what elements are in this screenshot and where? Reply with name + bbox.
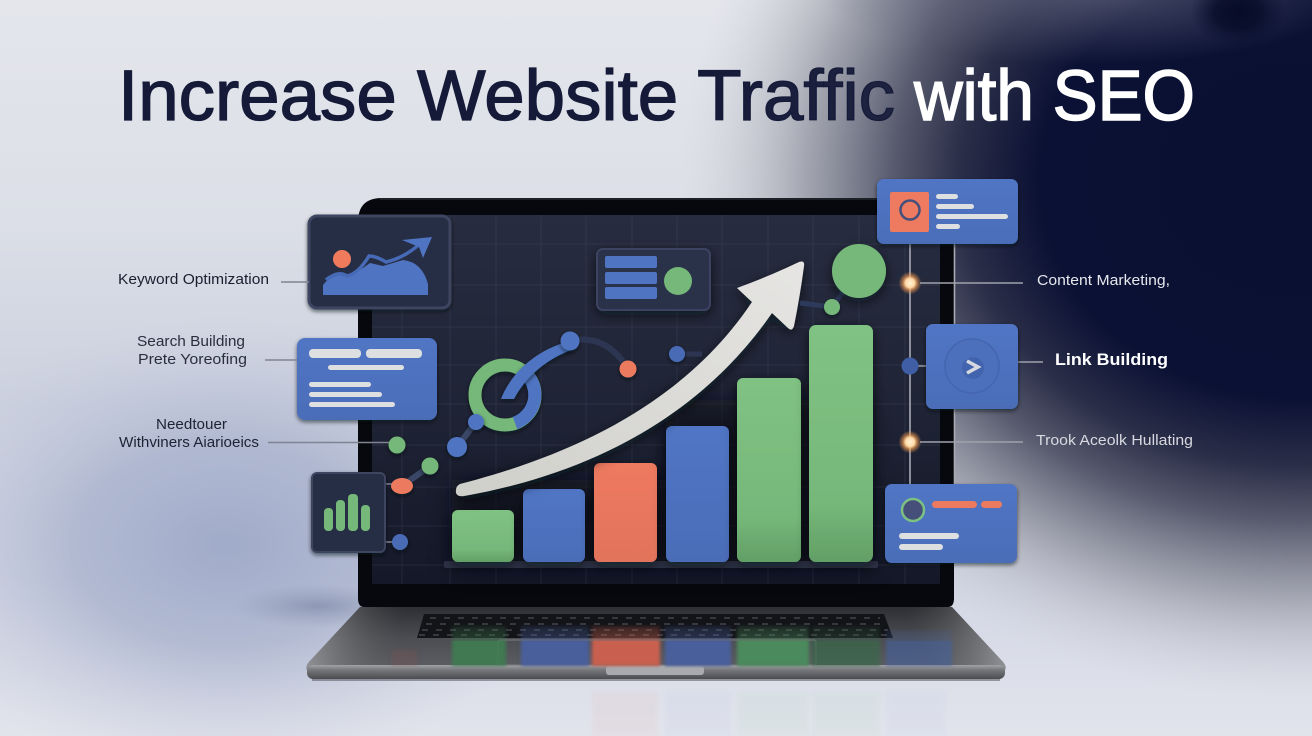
blue node <box>669 346 685 362</box>
icon: chevron <box>962 357 984 379</box>
label: keyword optimization: Keyword Optimization <box>118 271 269 288</box>
green target circles <box>800 244 886 315</box>
laptop <box>233 198 1006 736</box>
ring and curve diagram <box>384 332 702 550</box>
connector <box>677 352 702 356</box>
title: Increase Website Traffic <box>118 57 895 136</box>
bar 3 <box>594 463 657 562</box>
connector lines <box>265 240 1043 484</box>
upward arrow <box>456 262 804 496</box>
icon: coral square with ring <box>890 192 929 232</box>
icon: area chart with arrow <box>323 237 432 295</box>
panel: search text card <box>297 338 437 420</box>
dots path <box>384 414 484 550</box>
panel: link building card <box>926 324 1018 409</box>
glowing node 2 <box>898 430 922 454</box>
node <box>560 332 580 350</box>
screen reflection on base <box>392 626 952 666</box>
title: with SEO <box>913 57 1195 136</box>
bar 4 <box>666 426 729 562</box>
screen <box>372 215 940 584</box>
glowing node 1 <box>898 272 922 294</box>
trackpad <box>498 640 816 665</box>
label: search building: Prete Yoreofing <box>138 351 247 368</box>
label: needtouer: Withviners Aiarioeics <box>119 434 259 451</box>
blue curve <box>501 341 574 399</box>
blue node <box>902 358 918 374</box>
table reflection <box>592 692 946 736</box>
label: link building: Link Building <box>1055 351 1168 369</box>
laptop lid <box>358 198 954 607</box>
bar 6 <box>809 325 873 562</box>
bar 1 <box>452 510 514 562</box>
label: trook aceolk hullating: Trook Aceolk Hullating <box>1036 432 1193 449</box>
screen shadows <box>452 400 872 568</box>
panel: profile card <box>885 484 1017 563</box>
laptop base <box>306 607 1006 681</box>
keyboard <box>417 614 893 638</box>
panel: mini bar chart <box>312 473 385 552</box>
label: search building: Search Building <box>137 333 245 350</box>
label: search building <box>137 333 247 368</box>
bar 2 <box>523 489 585 562</box>
bar 5 <box>737 378 801 562</box>
label: needtouer <box>119 416 259 451</box>
coral node <box>620 360 636 378</box>
ring <box>475 365 535 425</box>
panel: content card <box>877 179 1018 244</box>
big green circle <box>832 244 886 298</box>
label: needtouer: Needtouer <box>156 416 227 433</box>
bar chart <box>444 325 878 568</box>
panel: keyword chart <box>309 216 450 308</box>
small green node <box>824 299 840 315</box>
label: content marketing: Content Marketing, <box>1037 272 1170 289</box>
panel: list widget <box>597 249 710 310</box>
chart shelf <box>444 561 878 568</box>
laptop shadow <box>233 584 403 628</box>
dark arc <box>570 340 628 369</box>
